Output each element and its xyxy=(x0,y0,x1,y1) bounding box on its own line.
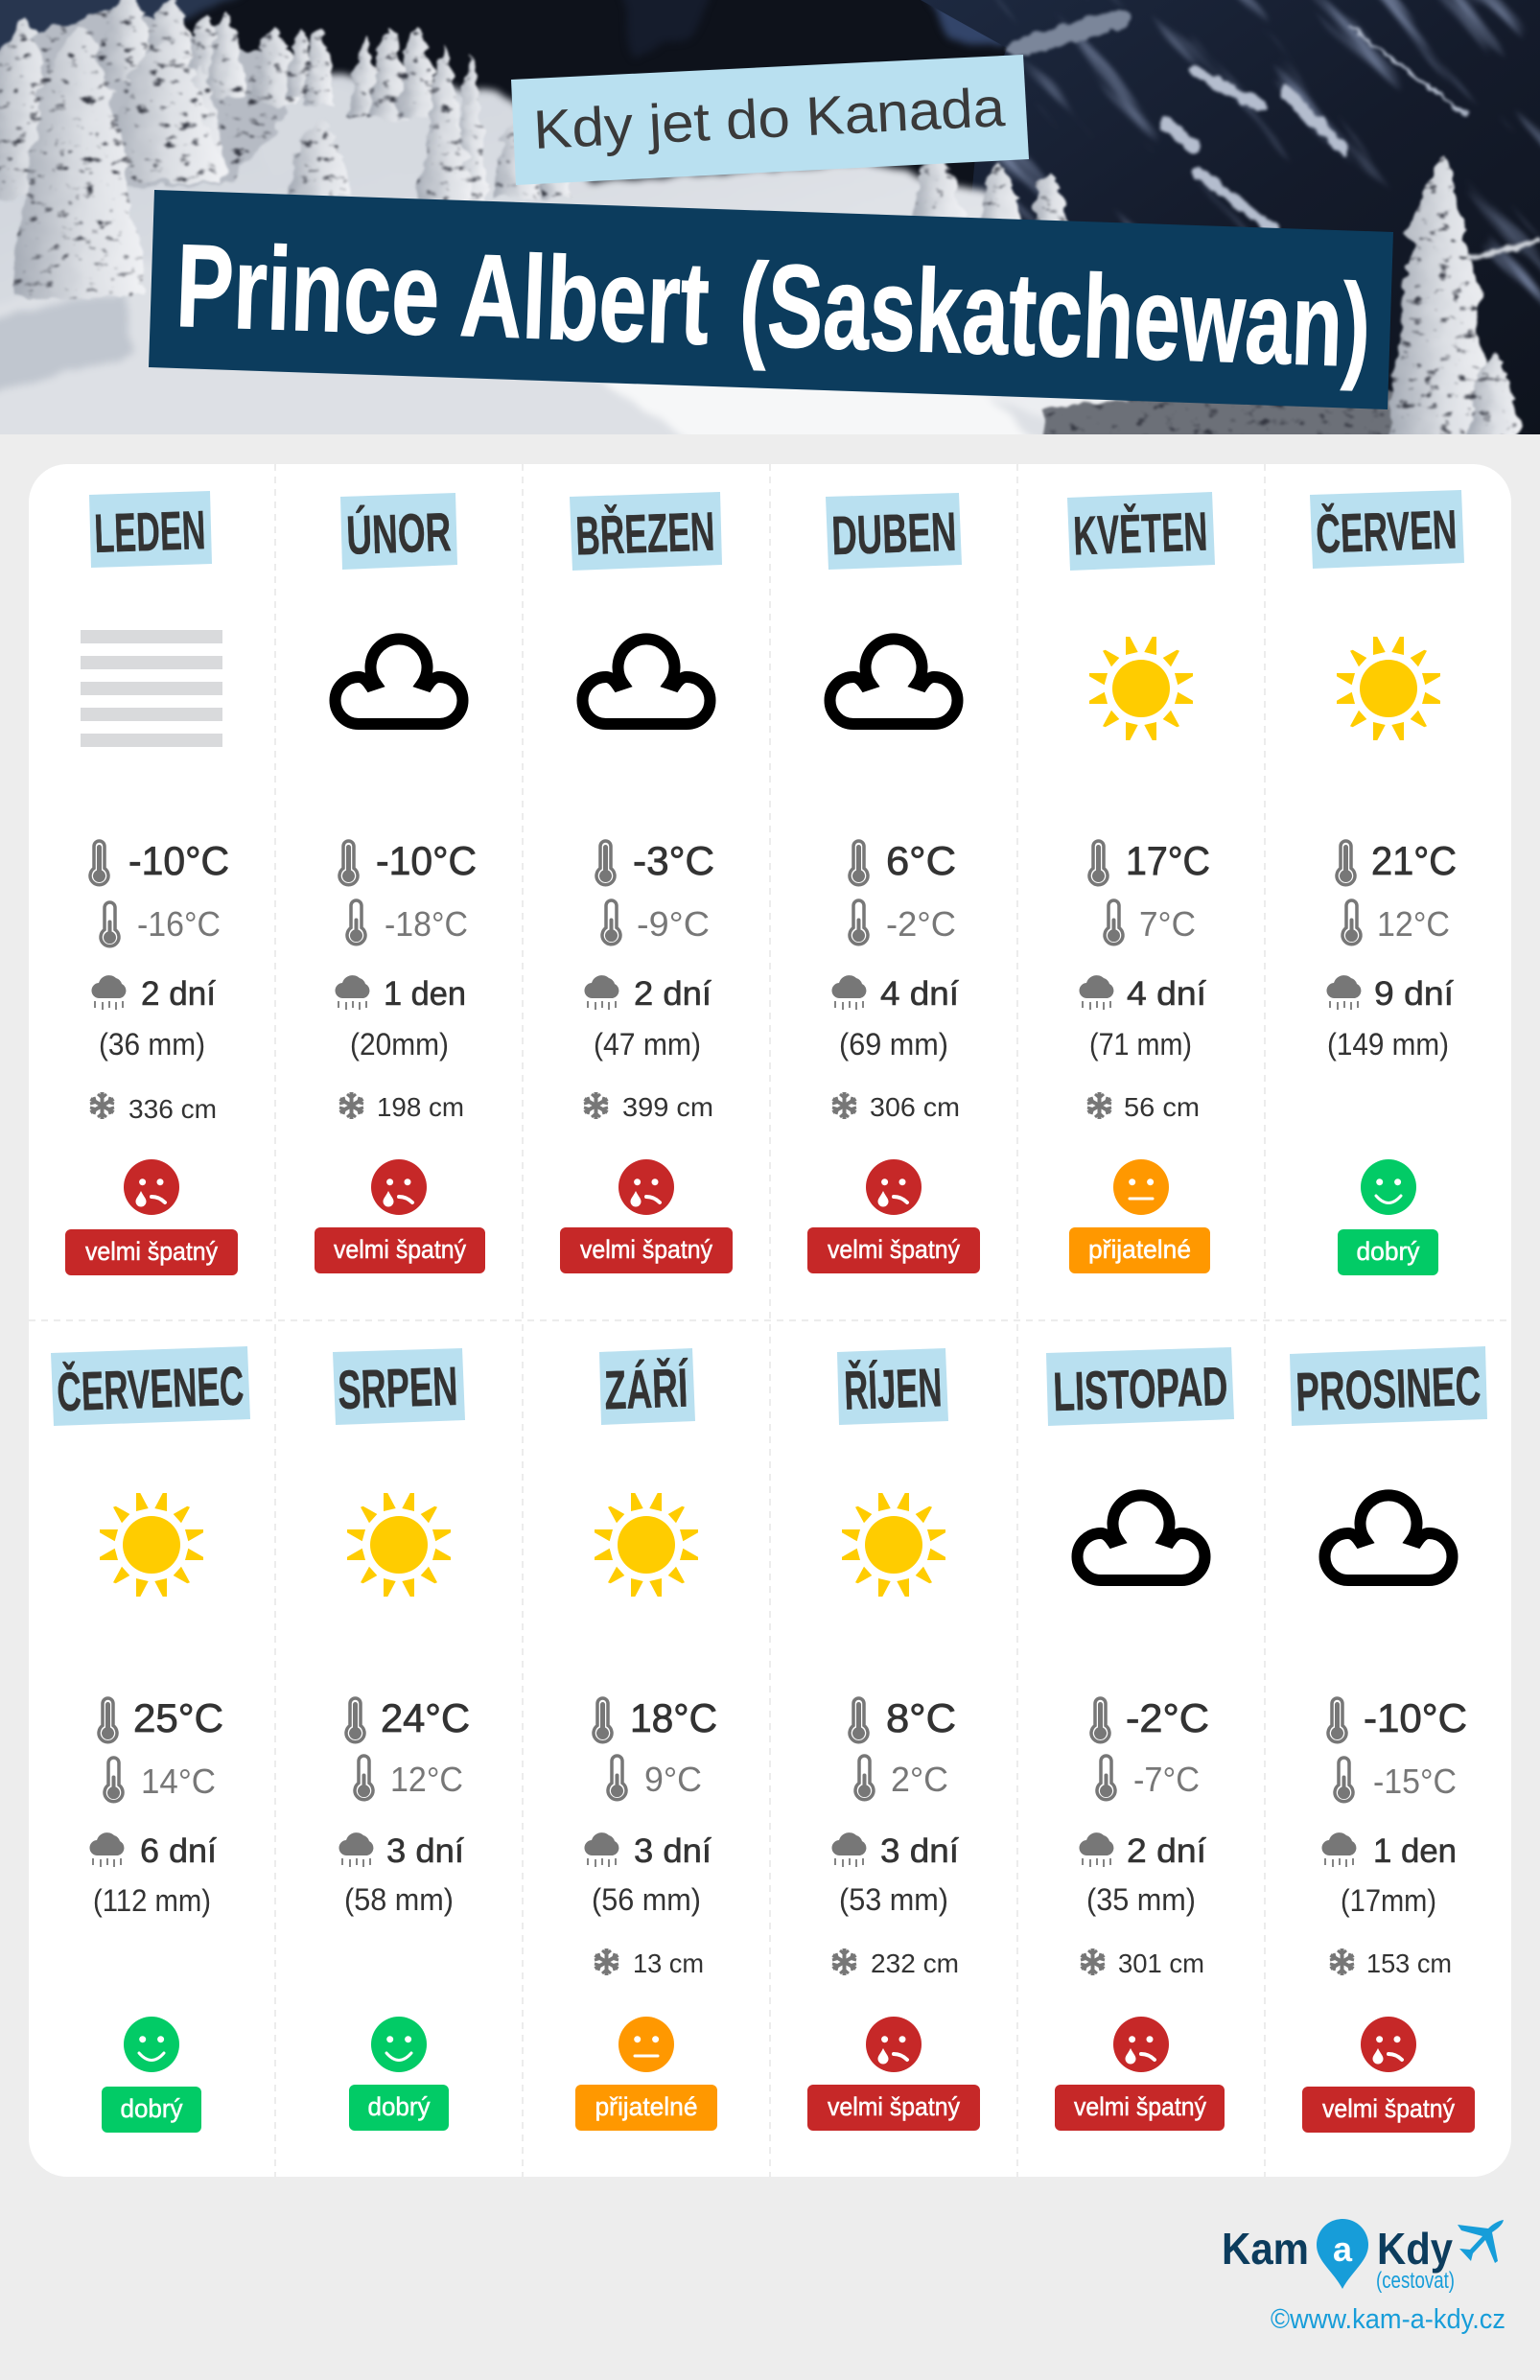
month label: leden xyxy=(89,491,212,568)
icon: sun xyxy=(842,1493,945,1597)
month label: brezen: BŘEZEN xyxy=(574,500,715,568)
rating badge xyxy=(65,1229,238,1275)
low temperature: -18°C xyxy=(385,904,468,944)
low temperature xyxy=(347,900,468,945)
rating badge xyxy=(1302,2087,1475,2133)
month label: cerven xyxy=(1310,490,1464,569)
rating badge xyxy=(1338,1229,1438,1275)
rating face xyxy=(1113,1159,1169,1215)
title banner xyxy=(149,190,1393,409)
low temperature: -15°C xyxy=(1373,1762,1457,1801)
low temperature xyxy=(602,900,710,945)
rainy days: 4 dní xyxy=(1127,975,1206,1013)
panel: brezen xyxy=(560,492,733,1273)
rating badge: přijatelné xyxy=(1088,1235,1191,1264)
precipitation: (71 mm) xyxy=(1089,1027,1192,1062)
precipitation: (149 mm) xyxy=(1327,1027,1449,1062)
precipitation: (47 mm) xyxy=(594,1027,701,1062)
snow depth: 301 cm xyxy=(1118,1948,1204,1978)
precipitation: (36 mm) xyxy=(99,1027,205,1062)
snow depth: 399 cm xyxy=(622,1092,713,1122)
panel: cerven xyxy=(1310,490,1464,1275)
rainy days xyxy=(89,1832,217,1870)
high temperature: -2°C xyxy=(1126,1695,1209,1740)
icon: fog xyxy=(81,630,222,747)
low temperature xyxy=(1342,900,1450,945)
rainy days xyxy=(335,975,466,1013)
rainy days xyxy=(1079,975,1206,1013)
logo: Kam a Kdy: Kam xyxy=(1222,2224,1309,2274)
rainy days xyxy=(91,975,216,1013)
website credit: ©www.kam-a-kdy.cz xyxy=(1271,2304,1505,2335)
month label: listopad: LISTOPAD xyxy=(1052,1356,1228,1423)
snow depth xyxy=(584,1092,713,1122)
rating badge xyxy=(1055,2085,1225,2131)
snow depth xyxy=(1330,1948,1452,1978)
snow depth xyxy=(595,1948,704,1978)
rating badge xyxy=(560,1227,733,1273)
rating face xyxy=(124,2017,179,2072)
icon: cloud xyxy=(1325,1495,1452,1580)
snow depth: 306 cm xyxy=(870,1092,960,1122)
rating face xyxy=(1361,2017,1416,2072)
snow depth xyxy=(832,1948,959,1978)
rating badge: dobrý xyxy=(121,2094,183,2123)
month label: kveten xyxy=(1067,492,1215,571)
rating badge xyxy=(807,1227,980,1273)
rainy days: 1 den xyxy=(384,975,466,1013)
high temperature: 18°C xyxy=(630,1695,717,1740)
high temperature xyxy=(90,838,229,885)
rating badge: dobrý xyxy=(368,2092,431,2121)
month label: cerven: ČERVEN xyxy=(1315,498,1458,566)
high temperature xyxy=(1089,838,1210,885)
month label: zari xyxy=(599,1348,695,1425)
rating face xyxy=(371,2017,427,2072)
icon: sun xyxy=(595,1493,698,1597)
high temperature xyxy=(596,838,714,885)
high temperature xyxy=(1091,1695,1209,1742)
low temperature xyxy=(608,1756,702,1800)
rainy days xyxy=(1079,1832,1206,1870)
panel: duben xyxy=(807,493,980,1273)
month label: duben: DUBEN xyxy=(830,502,957,567)
white card xyxy=(29,464,1511,2177)
icon: map pin xyxy=(1317,2219,1368,2289)
low temperature: -7°C xyxy=(1133,1760,1200,1799)
logo: Kam a Kdy: Kdy xyxy=(1377,2224,1453,2274)
rainy days: 4 dní xyxy=(880,975,959,1013)
rating badge xyxy=(807,2085,980,2131)
subtitle label xyxy=(511,55,1029,185)
rating badge: velmi špatný xyxy=(828,1235,960,1264)
icon: cloud xyxy=(336,639,462,724)
panel: srpen xyxy=(333,1348,470,2131)
month label: rijen: ŘÍJEN xyxy=(843,1356,943,1422)
high temperature: -10°C xyxy=(128,838,229,883)
logo: Kam a Kdy xyxy=(1222,2219,1504,2294)
snow depth xyxy=(832,1092,960,1122)
snow depth xyxy=(90,1092,217,1124)
month label: brezen xyxy=(570,492,722,571)
snow depth: 13 cm xyxy=(633,1948,704,1978)
rating face xyxy=(1361,1159,1416,1215)
low temperature xyxy=(355,1756,463,1800)
rating badge xyxy=(575,2085,717,2131)
rating face xyxy=(124,1159,179,1215)
rainy days: 9 dní xyxy=(1374,975,1454,1013)
high temperature: 8°C xyxy=(886,1695,956,1740)
high temperature: -10°C xyxy=(376,838,477,883)
low temperature: 12°C xyxy=(390,1760,463,1799)
high temperature: 21°C xyxy=(1371,838,1457,883)
snow patches on mountain xyxy=(992,0,1540,434)
high temperature: -3°C xyxy=(633,838,714,883)
month label: duben xyxy=(826,493,962,570)
high temperature: -10°C xyxy=(1364,1695,1467,1740)
month label: leden: LEDEN xyxy=(93,500,206,565)
month label: unor xyxy=(340,493,457,570)
high temperature: 6°C xyxy=(886,838,956,883)
icon: plane xyxy=(1458,2220,1504,2263)
precipitation: (69 mm) xyxy=(839,1027,948,1062)
month label: cervenec xyxy=(51,1346,250,1426)
panel: kveten xyxy=(1067,492,1215,1273)
snow depth: 153 cm xyxy=(1366,1948,1452,1978)
rainy days xyxy=(831,1832,959,1870)
rating badge: velmi špatný xyxy=(828,2092,960,2121)
low temperature: -9°C xyxy=(637,904,710,944)
logo: Kam a Kdy: (cestovat) xyxy=(1376,2268,1455,2294)
month label: cervenec: ČERVENEC xyxy=(56,1355,245,1423)
icon: cloud xyxy=(1078,1495,1204,1580)
high temperature xyxy=(594,1695,717,1742)
low temperature xyxy=(1097,1756,1200,1800)
precipitation: (58 mm) xyxy=(344,1882,454,1917)
low temperature xyxy=(1335,1758,1457,1802)
panel: leden xyxy=(65,491,238,1275)
rainy days xyxy=(584,975,712,1013)
month label: kveten: KVĚTEN xyxy=(1072,501,1208,567)
high temperature xyxy=(1337,838,1457,885)
snow slopes xyxy=(0,67,1133,434)
rating face xyxy=(371,1159,427,1215)
panel: prosinec xyxy=(1290,1346,1487,2133)
rainy days: 3 dní xyxy=(880,1832,959,1870)
rainy days xyxy=(1326,975,1454,1013)
panel: zari xyxy=(575,1348,717,2131)
low temperature: 12°C xyxy=(1377,904,1450,944)
high temperature xyxy=(850,1695,956,1742)
high temperature: 24°C xyxy=(381,1695,470,1740)
title banner: Prince Albert xyxy=(174,221,712,370)
rainy days: 2 dní xyxy=(634,975,712,1013)
snow depth xyxy=(339,1092,464,1122)
precipitation: (53 mm) xyxy=(839,1882,948,1917)
precipitation: (56 mm) xyxy=(592,1882,701,1917)
icon: sun xyxy=(347,1493,451,1597)
rating badge: velmi špatný xyxy=(1074,2092,1206,2121)
month label: rijen xyxy=(837,1348,948,1425)
snow depth: 56 cm xyxy=(1124,1092,1200,1122)
rating badge: velmi špatný xyxy=(1322,2094,1455,2123)
rainy days xyxy=(1321,1832,1457,1870)
low temperature xyxy=(855,1756,948,1800)
month label: zari: ZÁŘÍ xyxy=(603,1356,690,1421)
month label: srpen: SRPEN xyxy=(337,1356,458,1421)
icon: cloud xyxy=(583,639,710,724)
high temperature xyxy=(339,838,477,885)
rating badge xyxy=(1069,1227,1210,1273)
high temperature: 17°C xyxy=(1126,838,1210,883)
rainy days xyxy=(584,1832,712,1870)
panel: rijen xyxy=(807,1348,980,2131)
high temperature xyxy=(99,1695,223,1742)
rating face xyxy=(866,1159,922,1215)
low temperature xyxy=(101,902,221,946)
low temperature: 7°C xyxy=(1139,904,1196,944)
rainy days: 1 den xyxy=(1373,1832,1457,1870)
low temperature xyxy=(1105,900,1196,945)
rating badge: přijatelné xyxy=(595,2092,698,2121)
icon: cloud xyxy=(830,639,957,724)
icon: map pin: a xyxy=(1333,2229,1353,2269)
rating badge: velmi špatný xyxy=(334,1235,466,1264)
low temperature xyxy=(850,900,956,945)
precipitation: (20mm) xyxy=(350,1027,449,1062)
icon: sun xyxy=(100,1493,203,1597)
rating badge xyxy=(349,2085,449,2131)
rainy days: 2 dní xyxy=(1127,1832,1206,1870)
low temperature xyxy=(105,1758,216,1802)
snow depth xyxy=(1081,1948,1204,1978)
low temperature: -2°C xyxy=(886,904,956,944)
high temperature xyxy=(850,838,956,885)
snowy trees xyxy=(0,0,1520,441)
rainy days: 2 dní xyxy=(141,975,216,1013)
high temperature xyxy=(346,1695,470,1742)
rainy days: 3 dní xyxy=(386,1832,464,1870)
snow depth: 232 cm xyxy=(871,1948,959,1978)
rating badge: velmi špatný xyxy=(580,1235,712,1264)
rainy days xyxy=(831,975,959,1013)
month label: listopad xyxy=(1046,1347,1234,1426)
high temperature: 25°C xyxy=(133,1695,223,1740)
snow depth: 336 cm xyxy=(128,1094,217,1124)
panel: cervenec xyxy=(51,1346,250,2133)
snow depth xyxy=(1087,1092,1200,1122)
rating badge xyxy=(315,1227,485,1273)
snow depth: 198 cm xyxy=(377,1092,464,1122)
panel: unor xyxy=(315,493,485,1273)
month label: unor: ÚNOR xyxy=(345,502,452,567)
rating badge xyxy=(102,2087,201,2133)
rainy days: 3 dní xyxy=(634,1832,712,1870)
rating face xyxy=(866,2017,922,2072)
low temperature: 14°C xyxy=(141,1762,216,1801)
rating face xyxy=(618,1159,674,1215)
rating face xyxy=(618,2017,674,2072)
icon: sun xyxy=(1089,637,1193,740)
low temperature: -16°C xyxy=(137,904,221,944)
header photo: snowy mountains xyxy=(0,0,1540,434)
rating badge: velmi špatný xyxy=(85,1237,218,1266)
precipitation: (35 mm) xyxy=(1086,1882,1196,1917)
low temperature: 9°C xyxy=(644,1760,702,1799)
precipitation: (112 mm) xyxy=(93,1883,211,1918)
icon: sun xyxy=(1337,637,1440,740)
rainy days: 6 dní xyxy=(140,1832,217,1870)
month label: srpen xyxy=(333,1348,465,1425)
rating face xyxy=(1113,2017,1169,2072)
rainy days xyxy=(338,1832,464,1870)
panel: listopad xyxy=(1046,1347,1234,2131)
rating badge: dobrý xyxy=(1356,1237,1420,1266)
precipitation: (17mm) xyxy=(1341,1883,1436,1918)
subtitle label: Kdy jet do Kanada xyxy=(532,77,1007,161)
low temperature: 2°C xyxy=(891,1760,948,1799)
